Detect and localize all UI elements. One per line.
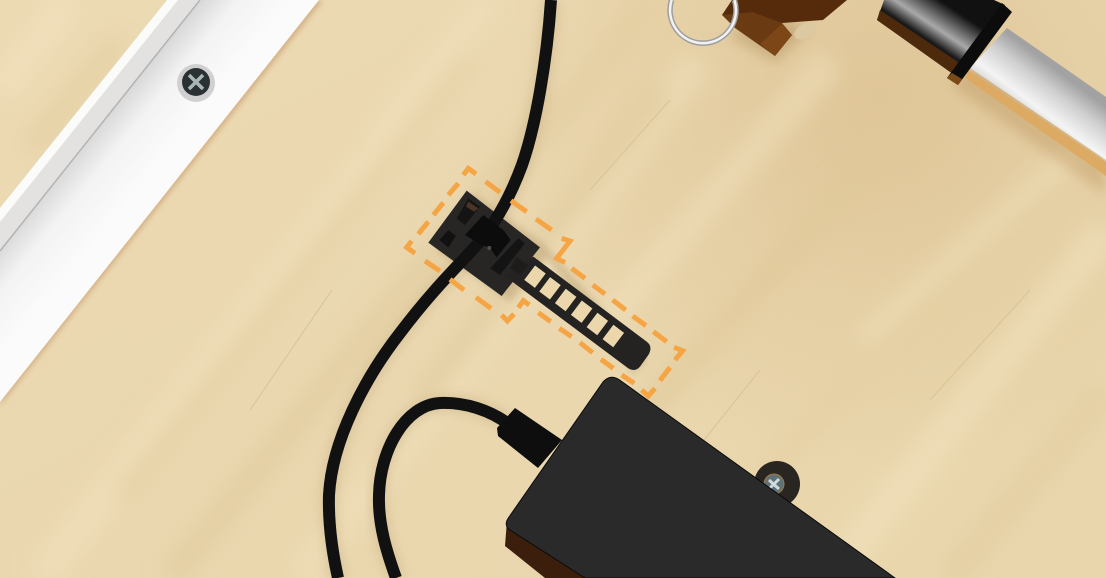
- adapter mounting tab with screw: [754, 461, 800, 507]
- perforated strap: [503, 257, 650, 370]
- white metal rail: [0, 0, 323, 405]
- clip shadow: [437, 193, 647, 373]
- cable strain relief connector: [497, 408, 562, 468]
- black collar: [877, 0, 1005, 74]
- orange dashed highlight outline: [407, 168, 683, 396]
- cable clip base plate and strap: [428, 191, 650, 373]
- cable shadow: [329, 0, 551, 578]
- second cable loop to power adapter: [379, 403, 510, 578]
- collar end ring: [947, 3, 1012, 85]
- black power adapter: [505, 377, 895, 578]
- rail screw: [177, 64, 215, 102]
- power cable from top through clip: [329, 0, 551, 578]
- support arm tube and collar: [877, 0, 1106, 195]
- clip latch details: [439, 198, 528, 275]
- adhesive base plate: [428, 191, 540, 296]
- brown mounting block: [722, 0, 847, 62]
- ring clip at top: [670, 0, 736, 43]
- wood-tone reflection strip: [965, 70, 1106, 176]
- silver tube: [970, 28, 1106, 160]
